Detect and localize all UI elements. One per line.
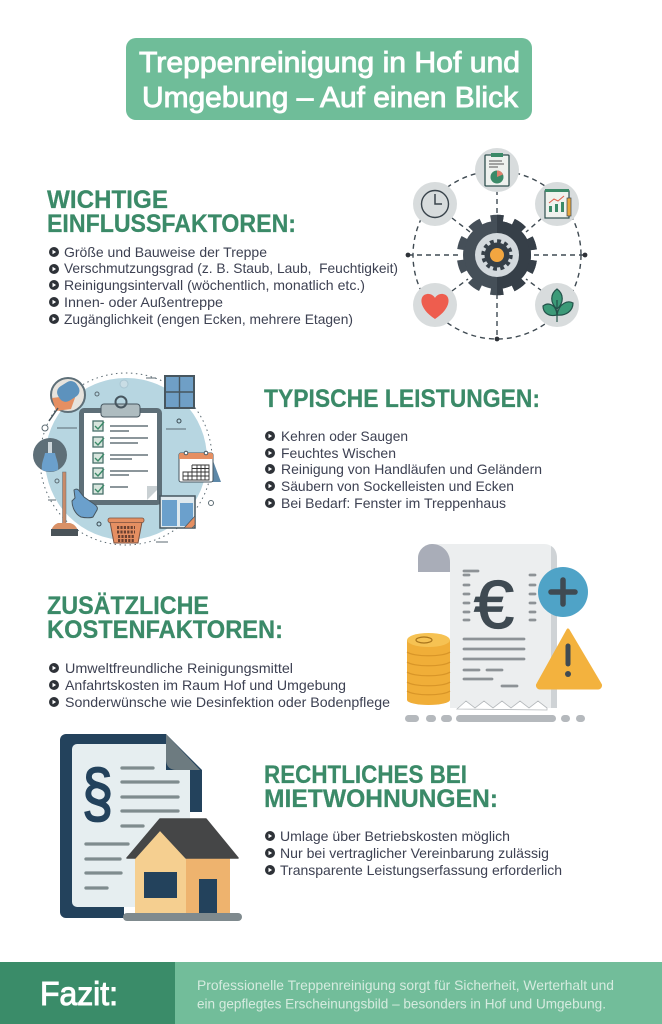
- window: [165, 376, 194, 408]
- sponge badge: [49, 378, 85, 421]
- window lower: [160, 496, 195, 528]
- panel: rechtliches bei Mietwohnungen: [264, 761, 562, 878]
- Fazit label: Fazit:: [40, 975, 118, 1012]
- list: Leistungen: [265, 428, 542, 511]
- icon: legal document with house: §: [82, 756, 113, 831]
- Fazit text: [197, 977, 614, 1012]
- broom: [51, 472, 78, 536]
- title banner: Umgebung – Auf einen Blick: [142, 82, 519, 114]
- heading: rechtliches bei Mietwohnungen: MIETWOHNUNGEN:: [264, 785, 498, 813]
- warning triangle: [538, 630, 600, 688]
- house: [123, 819, 242, 921]
- list: Leistungen: Kehren oder Saugen: [281, 428, 408, 444]
- title banner: [126, 38, 532, 120]
- heading: zusätzliche Kostenfaktoren: [47, 592, 283, 644]
- spray bottle: [72, 489, 97, 518]
- icon: cleaning checklist: [33, 373, 221, 545]
- list: Rechtliches: Transparente Leistungserfassung erforderlich: [280, 862, 562, 878]
- list: Leistungen: Feuchtes Wischen: [281, 445, 396, 461]
- heading: wichtige Einflussfaktoren: [47, 186, 296, 238]
- calendar: [179, 451, 221, 482]
- clipboard: [79, 396, 162, 505]
- list: Rechtliches: [265, 828, 562, 878]
- list: Einflussfaktoren: Verschmutzungsgrad (z. B. Staub, Laub, Feuchtigkeit): [64, 260, 398, 276]
- panel: wichtige Einflussfaktoren: [47, 186, 398, 327]
- panel: zusätzliche Kostenfaktoren: [47, 592, 390, 710]
- icon: invoice with coins: [405, 544, 600, 722]
- Fazit text: Professionelle Treppenreinigung sorgt für Sicherheit, Werterhalt und: [197, 977, 614, 993]
- broom badge: [33, 438, 67, 472]
- coin stack: [407, 633, 450, 705]
- list: Einflussfaktoren: Innen- oder Außentreppe: [64, 294, 223, 310]
- list: Kostenfaktoren: [49, 660, 390, 710]
- title banner: Treppenreinigung in Hof und: [139, 47, 520, 79]
- list: Leistungen: Säubern von Sockelleisten und Ecken: [281, 478, 514, 494]
- list: Rechtliches: Nur bei vertraglicher Vereinbarung zulässig: [280, 845, 549, 861]
- list: Rechtliches: Umlage über Betriebskosten möglich: [280, 828, 510, 844]
- icon: invoice with coins: €: [474, 567, 514, 643]
- list: Leistungen: Bei Bedarf: Fenster im Treppenhaus: [281, 495, 506, 511]
- list: Einflussfaktoren: Reinigungsintervall (wöchentlich, monatlich etc.): [64, 277, 365, 293]
- heading: wichtige Einflussfaktoren: WICHTIGE: [47, 186, 168, 214]
- list: Einflussfaktoren: Zugänglichkeit (engen Ecken, mehrere Etagen): [64, 311, 353, 327]
- list: Einflussfaktoren: Größe und Bauweise der Treppe: [64, 244, 267, 260]
- heading: wichtige Einflussfaktoren: EINFLUSSFAKTOREN:: [47, 210, 296, 238]
- plus badge: [538, 567, 588, 617]
- heading: zusätzliche Kostenfaktoren: ZUSÄTZLICHE: [47, 592, 209, 620]
- list: Kostenfaktoren: Umweltfreundliche Reinigungsmittel: [65, 660, 293, 676]
- heading: rechtliches bei Mietwohnungen: [264, 761, 498, 813]
- icon: legal document with house: [60, 734, 242, 921]
- heading: typische Leistungen: TYPISCHE LEISTUNGEN:: [264, 385, 540, 413]
- panel: typische Leistungen: [264, 385, 542, 511]
- list: Kostenfaktoren: Anfahrtskosten im Raum Hof und Umgebung: [65, 677, 346, 693]
- footer: Fazit: [0, 962, 662, 1024]
- basket: [108, 518, 144, 543]
- list: Kostenfaktoren: Sonderwünsche wie Desinfektion oder Bodenpflege: [65, 694, 390, 710]
- heading: rechtliches bei Mietwohnungen: RECHTLICHES BEI: [264, 761, 467, 789]
- Fazit text: ein gepflegtes Erscheinungsbild – besonders in Hof und Umgebung.: [197, 996, 606, 1012]
- list: Leistungen: Reinigung von Handläufen und Geländern: [281, 461, 542, 477]
- icon: gear network: [406, 148, 587, 341]
- decorative dots: [405, 715, 585, 722]
- heading: zusätzliche Kostenfaktoren: KOSTENFAKTOREN:: [47, 616, 283, 644]
- list: Einflussfaktoren: [49, 244, 398, 327]
